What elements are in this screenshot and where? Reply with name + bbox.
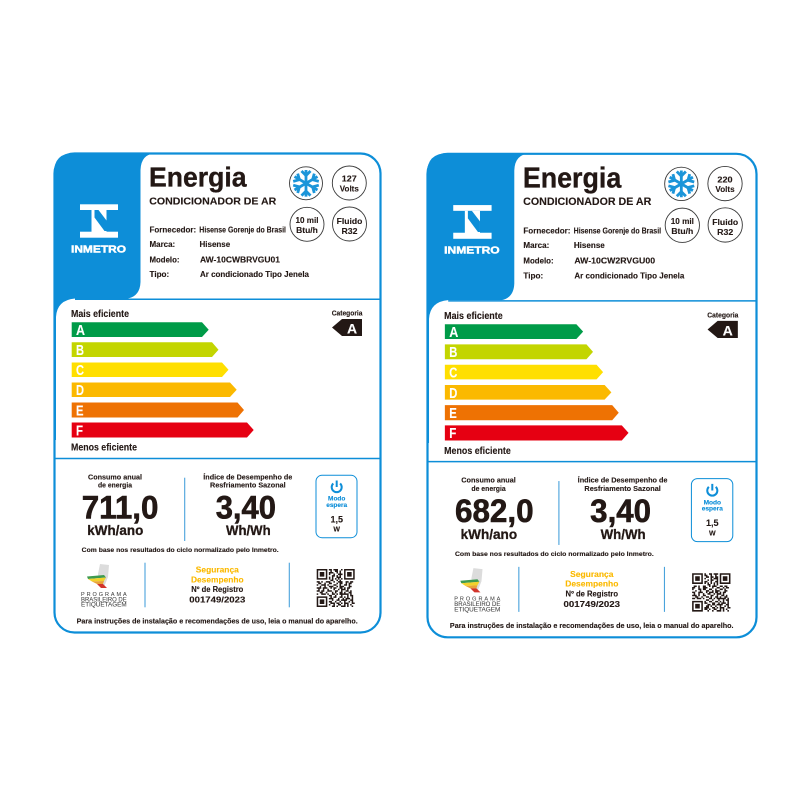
product details — [150, 225, 310, 279]
product details: Fornecedor: — [523, 226, 571, 235]
bar F: F — [76, 423, 83, 439]
product details: Hisense — [574, 241, 605, 250]
product details: Marca: — [523, 241, 549, 250]
badge: voltage: Volts — [340, 183, 359, 193]
seasonal cooling performance index: Wh/Wh — [601, 526, 646, 542]
heading: most efficient: Mais eficiente — [444, 311, 503, 322]
badge: refrigerant — [332, 207, 366, 241]
product details: Hisense — [200, 240, 231, 249]
registration block — [564, 569, 620, 609]
bar E: E — [76, 403, 84, 419]
bar E: E — [449, 406, 457, 422]
title: Energia — [149, 162, 247, 193]
product details: Tipo: — [523, 271, 543, 280]
annual energy consumption: 682,0 — [455, 493, 534, 529]
registration block: Desempenho — [191, 574, 244, 584]
badge: voltage: 127 — [342, 174, 357, 184]
section divider bottom — [54, 458, 381, 460]
icon: INMETRO logo: INMETRO — [444, 246, 500, 257]
icon: snowflake badge — [665, 167, 698, 201]
bar F — [72, 422, 254, 439]
annual energy consumption: Consumo anual — [88, 472, 142, 481]
standby mode box: 1,5 — [330, 514, 343, 524]
program logo: BRASILEIRO DE — [454, 602, 500, 608]
category marker: A — [723, 322, 733, 338]
blue logo panel — [427, 153, 530, 443]
bar C — [72, 362, 228, 379]
badge: voltage — [332, 166, 366, 200]
annual energy consumption: kWh/ano — [87, 522, 143, 538]
program logo: PROGRAMA — [81, 592, 127, 598]
footer note: Para instruções de instalação e recomendações de uso, leia o manual do aparelho. — [450, 623, 734, 630]
standby mode box — [316, 475, 357, 538]
seasonal cooling performance index: 3,40 — [216, 489, 276, 525]
bar B — [72, 342, 218, 359]
standby mode box: W — [709, 531, 716, 538]
bar A — [445, 324, 583, 341]
program logo: BRASILEIRO DE — [81, 597, 127, 603]
bar D: D — [449, 386, 457, 402]
QR code — [317, 569, 355, 607]
annual energy consumption: de energia — [471, 484, 506, 493]
subtitle: CONDICIONADOR DE AR — [523, 196, 652, 208]
badge: capacity — [290, 207, 324, 241]
icon: snowflake badge — [290, 167, 322, 200]
registration block: 001749/2023 — [189, 594, 246, 604]
heading: least efficient: Menos eficiente — [444, 446, 511, 457]
bar A: A — [449, 325, 459, 341]
standby mode box: 1,5 — [706, 518, 719, 528]
bar C: C — [449, 366, 458, 382]
bar E — [72, 402, 244, 419]
icon: INMETRO logo: INMETRO — [71, 244, 126, 256]
bar D: D — [76, 383, 84, 399]
badge: capacity — [665, 208, 699, 242]
section divider top — [448, 300, 757, 302]
program logo: PROGRAMA — [454, 596, 501, 602]
badge: capacity: Btu/h — [671, 226, 693, 236]
icon: INMETRO logo — [71, 204, 126, 256]
registration block: Nº de Registro — [191, 585, 243, 594]
badge: refrigerant: R32 — [717, 227, 734, 237]
bar C — [445, 365, 603, 382]
efficiency bar chart — [445, 324, 629, 442]
bar F — [445, 425, 629, 442]
seasonal cooling performance index: 3,40 — [590, 493, 651, 529]
product details: Modelo: — [523, 257, 554, 266]
annual energy consumption: kWh/ano — [461, 526, 517, 542]
bar B: B — [76, 343, 84, 359]
icon: power — [332, 480, 342, 492]
blue logo panel — [54, 153, 156, 440]
standby mode box: Modo — [328, 496, 345, 503]
seasonal cooling performance index — [203, 472, 292, 538]
badge: capacity: Btu/h — [296, 225, 318, 235]
cycle note: Com base nos resultados do ciclo normalizado pelo Inmetro. — [455, 551, 654, 558]
badge: voltage: 220 — [717, 174, 733, 184]
badge: refrigerant: Fluido — [712, 217, 738, 227]
seasonal cooling performance index: Resfriamento Sazonal — [210, 481, 286, 490]
standby mode box: Modo — [704, 499, 721, 506]
category marker — [707, 313, 738, 338]
badge: voltage: Volts — [715, 184, 735, 194]
standby mode box: espera — [326, 502, 348, 509]
registration block: Segurança — [196, 565, 239, 575]
category marker: Categoria — [707, 313, 738, 320]
bar A — [72, 322, 209, 339]
product details: Tipo: — [150, 270, 169, 279]
section divider top — [75, 298, 381, 300]
annual energy consumption: de energia — [98, 481, 133, 490]
QR code — [692, 573, 730, 612]
program logo: ETIQUETAGEM — [81, 603, 127, 609]
badge: voltage — [708, 166, 742, 201]
annual energy consumption — [82, 472, 158, 538]
registration block: Segurança — [570, 569, 614, 579]
heading: least efficient: Menos eficiente — [71, 443, 137, 454]
badge: capacity: 10 mil — [671, 216, 694, 226]
annual energy consumption: Consumo anual — [461, 476, 516, 485]
product details: Modelo: — [150, 255, 180, 264]
heading: most efficient: Mais eficiente — [71, 309, 129, 320]
label frame — [54, 154, 380, 632]
seasonal cooling performance index: Resfriamento Sazonal — [584, 484, 661, 493]
product details: Ar condicionado Tipo Jenela — [200, 270, 310, 279]
product details: Hisense Gorenje do Brasil — [574, 226, 661, 235]
badge: refrigerant — [708, 208, 742, 242]
category marker: Categoria — [332, 311, 363, 318]
program logo — [81, 564, 127, 609]
product details: Marca: — [150, 240, 175, 249]
bar A: A — [76, 323, 85, 339]
program logo: ETIQUETAGEM — [454, 607, 500, 613]
category marker — [332, 311, 363, 336]
bar E — [445, 405, 619, 422]
icon: power — [707, 484, 717, 496]
registration block: Nº de Registro — [566, 589, 618, 598]
registration block: 001749/2023 — [564, 599, 620, 609]
product details — [523, 226, 685, 280]
bar C: C — [76, 363, 84, 379]
product details: AW-10CW2RVGU00 — [574, 257, 656, 266]
bar F: F — [449, 426, 456, 442]
badge: refrigerant: Fluido — [337, 216, 362, 226]
product details: AW-10CWBRVGU01 — [200, 255, 281, 264]
standby mode box: W — [333, 527, 340, 534]
panel: energy label 127 V — [54, 153, 381, 632]
seasonal cooling performance index: Índice de Desempenho de — [203, 472, 292, 481]
badge: refrigerant: R32 — [342, 226, 358, 236]
bar B: B — [449, 345, 457, 361]
cycle note: Com base nos resultados do ciclo normalizado pelo Inmetro. — [82, 547, 279, 554]
annual energy consumption — [455, 476, 534, 542]
registration block: Desempenho — [565, 579, 618, 589]
efficiency bar chart — [72, 322, 254, 439]
badge: capacity: 10 mil — [296, 215, 318, 225]
registration block — [189, 565, 246, 604]
product details: Ar condicionado Tipo Jenela — [574, 271, 685, 280]
title: Energia — [523, 161, 622, 193]
annual energy consumption: 711,0 — [82, 489, 158, 525]
footer note: Para instruções de instalação e recomendações de uso, leia o manual do aparelho. — [77, 618, 358, 625]
standby mode box — [691, 479, 733, 542]
bar B — [445, 344, 593, 361]
product details: Hisense Gorenje do Brasil — [199, 225, 286, 234]
section divider bottom — [427, 461, 757, 463]
bar D — [445, 385, 611, 402]
label frame — [428, 154, 757, 637]
seasonal cooling performance index: Wh/Wh — [226, 522, 271, 538]
product details: Fornecedor: — [150, 225, 196, 234]
seasonal cooling performance index: Índice de Desempenho de — [578, 476, 667, 485]
standby mode box: espera — [702, 506, 723, 513]
category marker: A — [347, 320, 357, 336]
subtitle: CONDICIONADOR DE AR — [149, 195, 277, 207]
seasonal cooling performance index — [578, 476, 667, 542]
program logo — [454, 568, 501, 613]
panel: energy label 220 V — [427, 153, 757, 637]
icon: INMETRO logo — [444, 205, 500, 257]
bar D — [72, 382, 237, 399]
